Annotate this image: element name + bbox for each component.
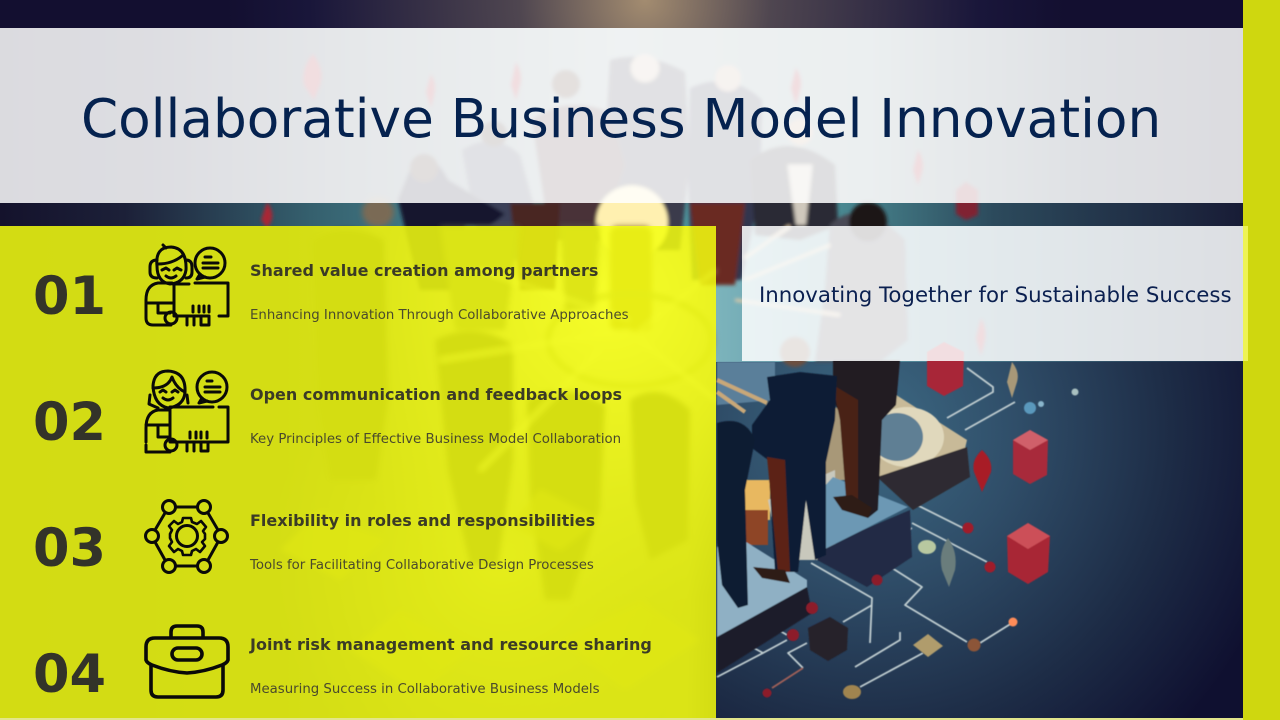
red cubes, pins and nodes [762, 342, 1078, 699]
brown suit man [833, 360, 900, 518]
description 2: Key Principles of Effective Business Model Collaboration [250, 432, 621, 447]
list item 2 [33, 385, 622, 453]
number 04: 04 [33, 644, 106, 705]
panel: subtitle banner [742, 226, 1248, 361]
panel: title banner [0, 28, 1243, 203]
number 03: 03 [33, 518, 106, 579]
number 01: 01 [33, 266, 106, 327]
pins under the title banner [261, 54, 986, 356]
platforms and standing executives [717, 360, 970, 673]
navy suit man [752, 372, 837, 572]
icon: woman agent at computer [146, 371, 228, 452]
heading 4: Joint risk management and resource sharing [250, 635, 652, 654]
subtitle: Innovating Together for Sustainable Success [759, 283, 1232, 308]
list item 1 [33, 261, 629, 327]
list item 3 [33, 511, 595, 579]
heading 1: Shared value creation among partners [250, 261, 598, 280]
people group [398, 54, 908, 367]
panel: numbered list [0, 226, 716, 718]
description 1: Enhancing Innovation Through Collaborative Approaches [250, 308, 629, 323]
heading 3: Flexibility in roles and responsibilities [250, 511, 595, 530]
icon: hexagonal network with gear [146, 500, 228, 572]
description 3: Tools for Facilitating Collaborative Design Processes [250, 558, 594, 573]
description 4: Measuring Success in Collaborative Business Models [250, 682, 600, 697]
heading 2: Open communication and feedback loops [250, 385, 622, 404]
list item 4 [33, 635, 652, 705]
number 02: 02 [33, 392, 106, 453]
left man [717, 421, 755, 608]
icon: briefcase [146, 626, 228, 697]
icon: headset agent at computer [146, 245, 228, 325]
silhouettes under the yellow panel [280, 197, 716, 695]
circuit floor lines [717, 368, 1015, 688]
title: Collaborative Business Model Innovation [81, 88, 1161, 150]
